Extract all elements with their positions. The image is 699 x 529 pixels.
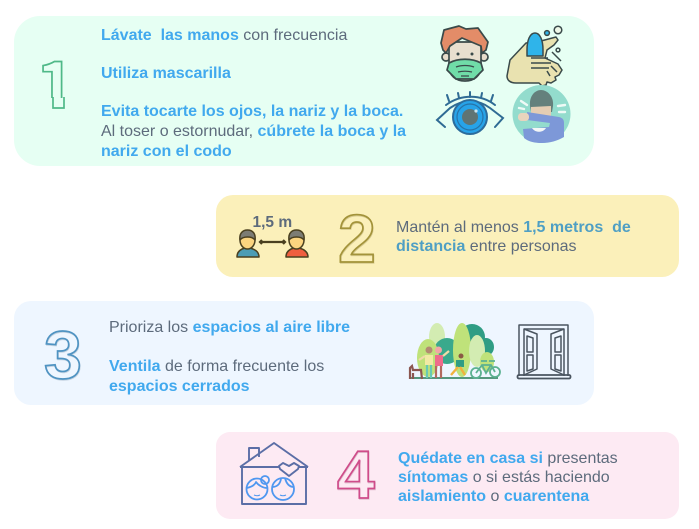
number 1: 1: [36, 33, 75, 129]
icon: open window: [518, 325, 570, 378]
text: stay home advice: síntomas o si estás haciendo: [398, 469, 610, 486]
panel: step 4 stay home: [216, 432, 679, 519]
text: hygiene advice: Al toser o estornudar, cúbrete la boca y la: [101, 123, 406, 140]
panel: step 2 distance: [216, 195, 679, 278]
text: distance advice: [396, 219, 631, 255]
text: distance advice: Mantén al menos 1,5 metros de: [396, 219, 631, 236]
icon: washing hands: [507, 26, 562, 86]
text: ventilation advice: [109, 319, 350, 395]
text: hygiene advice: Lávate las manos con frecuencia: [101, 27, 347, 44]
text: ventilation advice: espacios cerrados: [109, 378, 250, 395]
number 3: 3: [44, 317, 82, 393]
icon: person left: [237, 230, 259, 257]
icon: people in park: [410, 323, 500, 379]
number 4: 4: [338, 438, 376, 514]
icon: person right: [286, 230, 308, 257]
number 1: [42, 60, 65, 109]
text: hygiene advice: Evita tocarte los ojos, la nariz y la boca.: [101, 103, 403, 120]
text: hygiene advice: Utiliza mascarilla: [101, 65, 231, 82]
panel: step 3 ventilation: [14, 301, 594, 405]
text: hygiene advice: [101, 27, 406, 160]
icon: eye: [437, 92, 503, 134]
number 2: 2: [338, 202, 376, 278]
text: ventilation advice: Ventila de forma frecuente los: [109, 358, 324, 375]
icon: two people 1,5 m apart: 1,5 m: [252, 214, 292, 231]
text: distance advice: distancia entre personas: [396, 238, 577, 255]
icon: two people 1,5 m apart: [237, 214, 308, 257]
number 3: 3: [44, 318, 82, 394]
icon: coughing into elbow: [512, 85, 570, 143]
text: stay home advice: aislamiento o cuarentena: [398, 488, 589, 505]
number 4: 4: [337, 437, 375, 513]
panel: step 1 hygiene: [14, 16, 594, 166]
arrow: distance: [260, 240, 285, 244]
text: stay home advice: Quédate en casa si presentas: [398, 450, 618, 467]
icon: face with mask: [441, 26, 488, 81]
text: ventilation advice: Prioriza los espacios al aire libre: [109, 319, 350, 336]
text: hygiene advice: nariz con el codo: [101, 143, 232, 160]
number 2: 2: [338, 201, 376, 277]
text: stay home advice: [398, 450, 618, 505]
icon: house with family: [240, 443, 308, 504]
